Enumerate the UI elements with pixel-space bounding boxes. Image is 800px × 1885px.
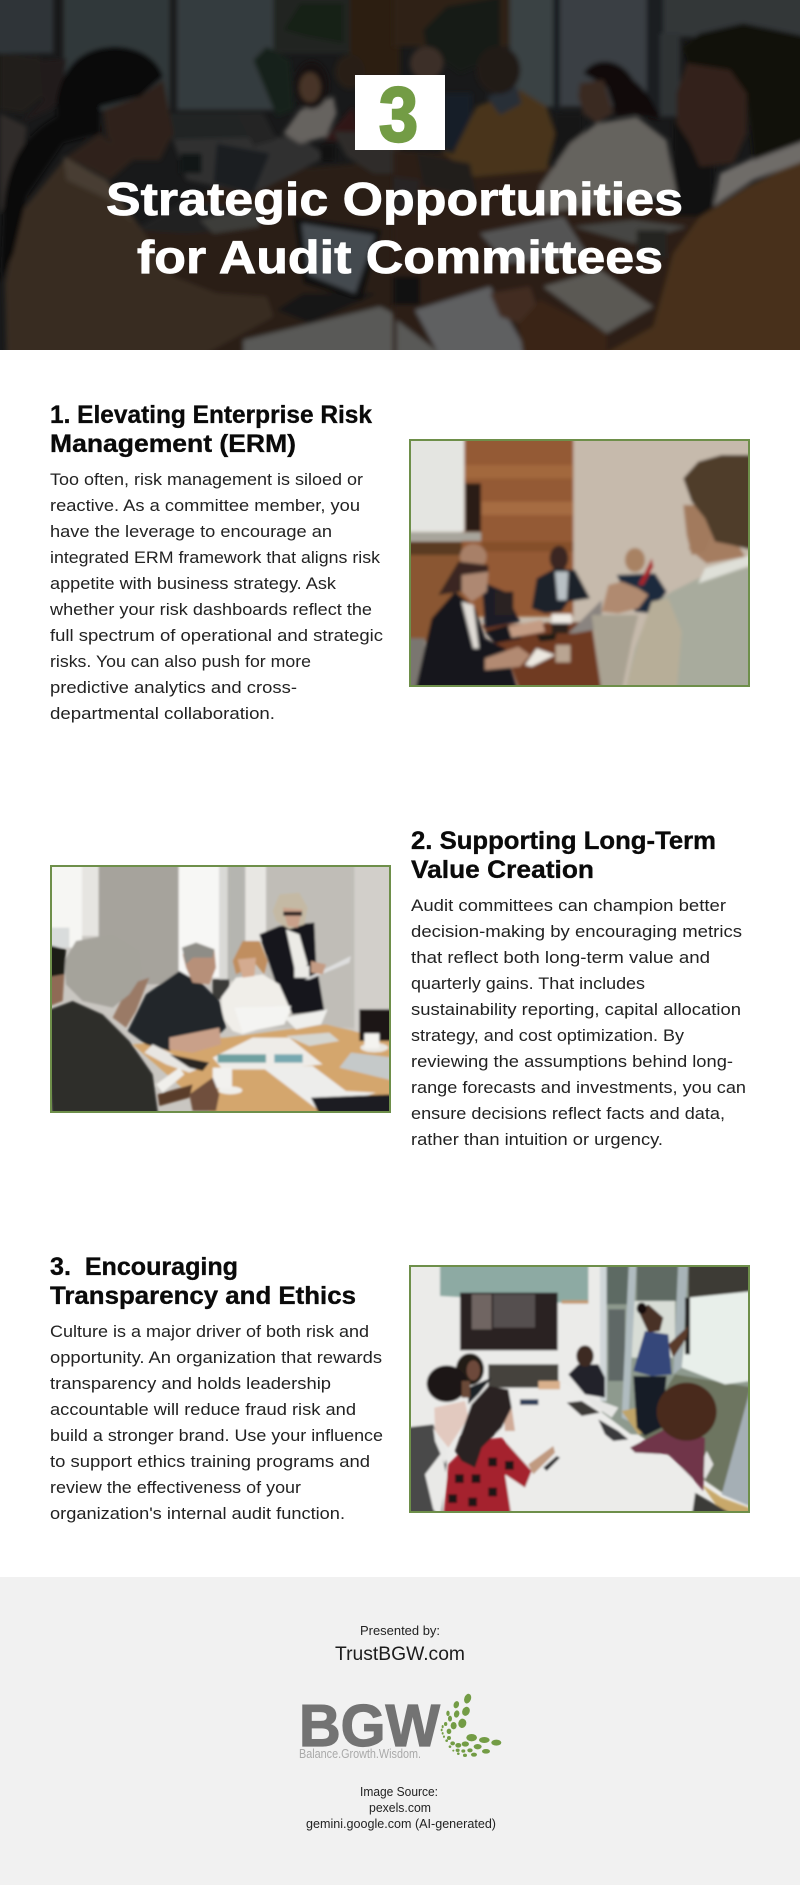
- presented by credit: [335, 1623, 465, 1665]
- section 1 body text: risks. You can also push for more: [50, 652, 311, 671]
- section 3 body text: organization's internal audit function.: [50, 1504, 345, 1523]
- section 1 body text: have the leverage to encourage an: [50, 522, 332, 541]
- section 1 photo: presenter facing a meeting table: [405, 435, 753, 692]
- section 1 body text: full spectrum of operational and strategic: [50, 626, 384, 645]
- section 1 body text: whether your risk dashboards reflect the: [49, 600, 372, 619]
- presented by credit: TrustBGW.com: [335, 1644, 465, 1665]
- hero banner: [0, 0, 800, 357]
- section 3 heading: [50, 1253, 356, 1310]
- footer panel: [0, 1577, 800, 1885]
- section 1 body text: [49, 470, 384, 723]
- section 3 body text: transparency and holds leadership: [50, 1374, 331, 1393]
- number badge: 3: [355, 72, 445, 158]
- section 2: Supporting Long-Term Value Creation: [46, 827, 746, 1149]
- section 3 body text: [50, 1322, 383, 1523]
- section 1 body text: Too often, risk management is siloed or: [50, 470, 363, 489]
- section 2 body text: ensure decisions reflect facts and data,: [411, 1104, 725, 1123]
- section 2 body text: strategy, and cost optimization. By: [411, 1026, 685, 1045]
- image source credits: gemini.google.com (AI-generated): [306, 1816, 496, 1831]
- title: [106, 173, 683, 283]
- hero photo: boardroom meeting: [0, 0, 800, 357]
- title: for Audit Committees: [137, 231, 663, 283]
- section 3 body text: build a stronger brand. Use your influence: [50, 1426, 383, 1445]
- BGW logo: Balance.Growth.Wisdom.: [299, 1747, 421, 1761]
- section 2 body text: reviewing the assumptions behind long-: [411, 1052, 733, 1071]
- section 1 heading: Management (ERM): [50, 430, 296, 458]
- image source credits: Image Source:: [360, 1784, 438, 1799]
- section 1 body text: predictive analytics and cross-: [50, 678, 297, 697]
- section 2 heading: Value Creation: [411, 856, 594, 884]
- number badge: 3: 3: [379, 72, 418, 158]
- section 2 body text: rather than intuition or urgency.: [411, 1130, 663, 1149]
- section 3 body text: opportunity. An organization that rewards: [50, 1348, 382, 1367]
- section 2 body text: Audit committees can champion better: [411, 896, 726, 915]
- section 3 heading: 3. Encouraging: [50, 1253, 238, 1281]
- section 1 body text: integrated ERM framework that aligns risk: [50, 548, 381, 567]
- section 3 photo: team at a white table with a flip chart: [405, 1261, 753, 1518]
- section 2 body text: [411, 896, 746, 1149]
- section 1: Elevating Enterprise Risk Management: [49, 401, 753, 723]
- section 1 body text: departmental collaboration.: [50, 704, 275, 723]
- section 1 heading: 1. Elevating Enterprise Risk: [50, 401, 372, 429]
- section 2 body text: that reflect both long-term value and: [411, 948, 710, 967]
- image source credits: [306, 1784, 496, 1831]
- section 2 photo: team reviewing charts at a table: [46, 861, 394, 1118]
- section 2 heading: 2. Supporting Long-Term: [411, 827, 716, 855]
- BGW logo: BGW: [299, 1693, 440, 1759]
- section 2 body text: quarterly gains. That includes: [411, 974, 645, 993]
- section 1 body text: reactive. As a committee member, you: [50, 496, 360, 515]
- icon: green leaf dots: [441, 1693, 501, 1757]
- title: Strategic Opportunities: [106, 173, 683, 225]
- section 3 body text: accountable will reduce fraud risk and: [50, 1400, 356, 1419]
- section 3 body text: to support ethics training programs and: [50, 1452, 370, 1471]
- section 2 heading: [411, 827, 716, 884]
- section 1 body text: appetite with business strategy. Ask: [50, 574, 337, 593]
- presented by credit: Presented by:: [360, 1623, 440, 1638]
- section 3 body text: Culture is a major driver of both risk and: [50, 1322, 369, 1341]
- section 2 body text: range forecasts and investments, you can: [411, 1078, 746, 1097]
- section 3 body text: review the effectiveness of your: [50, 1478, 301, 1497]
- section 3: Encouraging Transparency and Ethics: [50, 1253, 753, 1523]
- section 3 heading: Transparency and Ethics: [50, 1282, 356, 1310]
- image source credits: pexels.com: [369, 1800, 431, 1815]
- section 1 heading: [50, 401, 372, 458]
- section 2 body text: decision-making by encouraging metrics: [411, 922, 742, 941]
- BGW logo: [299, 1693, 501, 1761]
- section 2 body text: sustainability reporting, capital allocation: [411, 1000, 741, 1019]
